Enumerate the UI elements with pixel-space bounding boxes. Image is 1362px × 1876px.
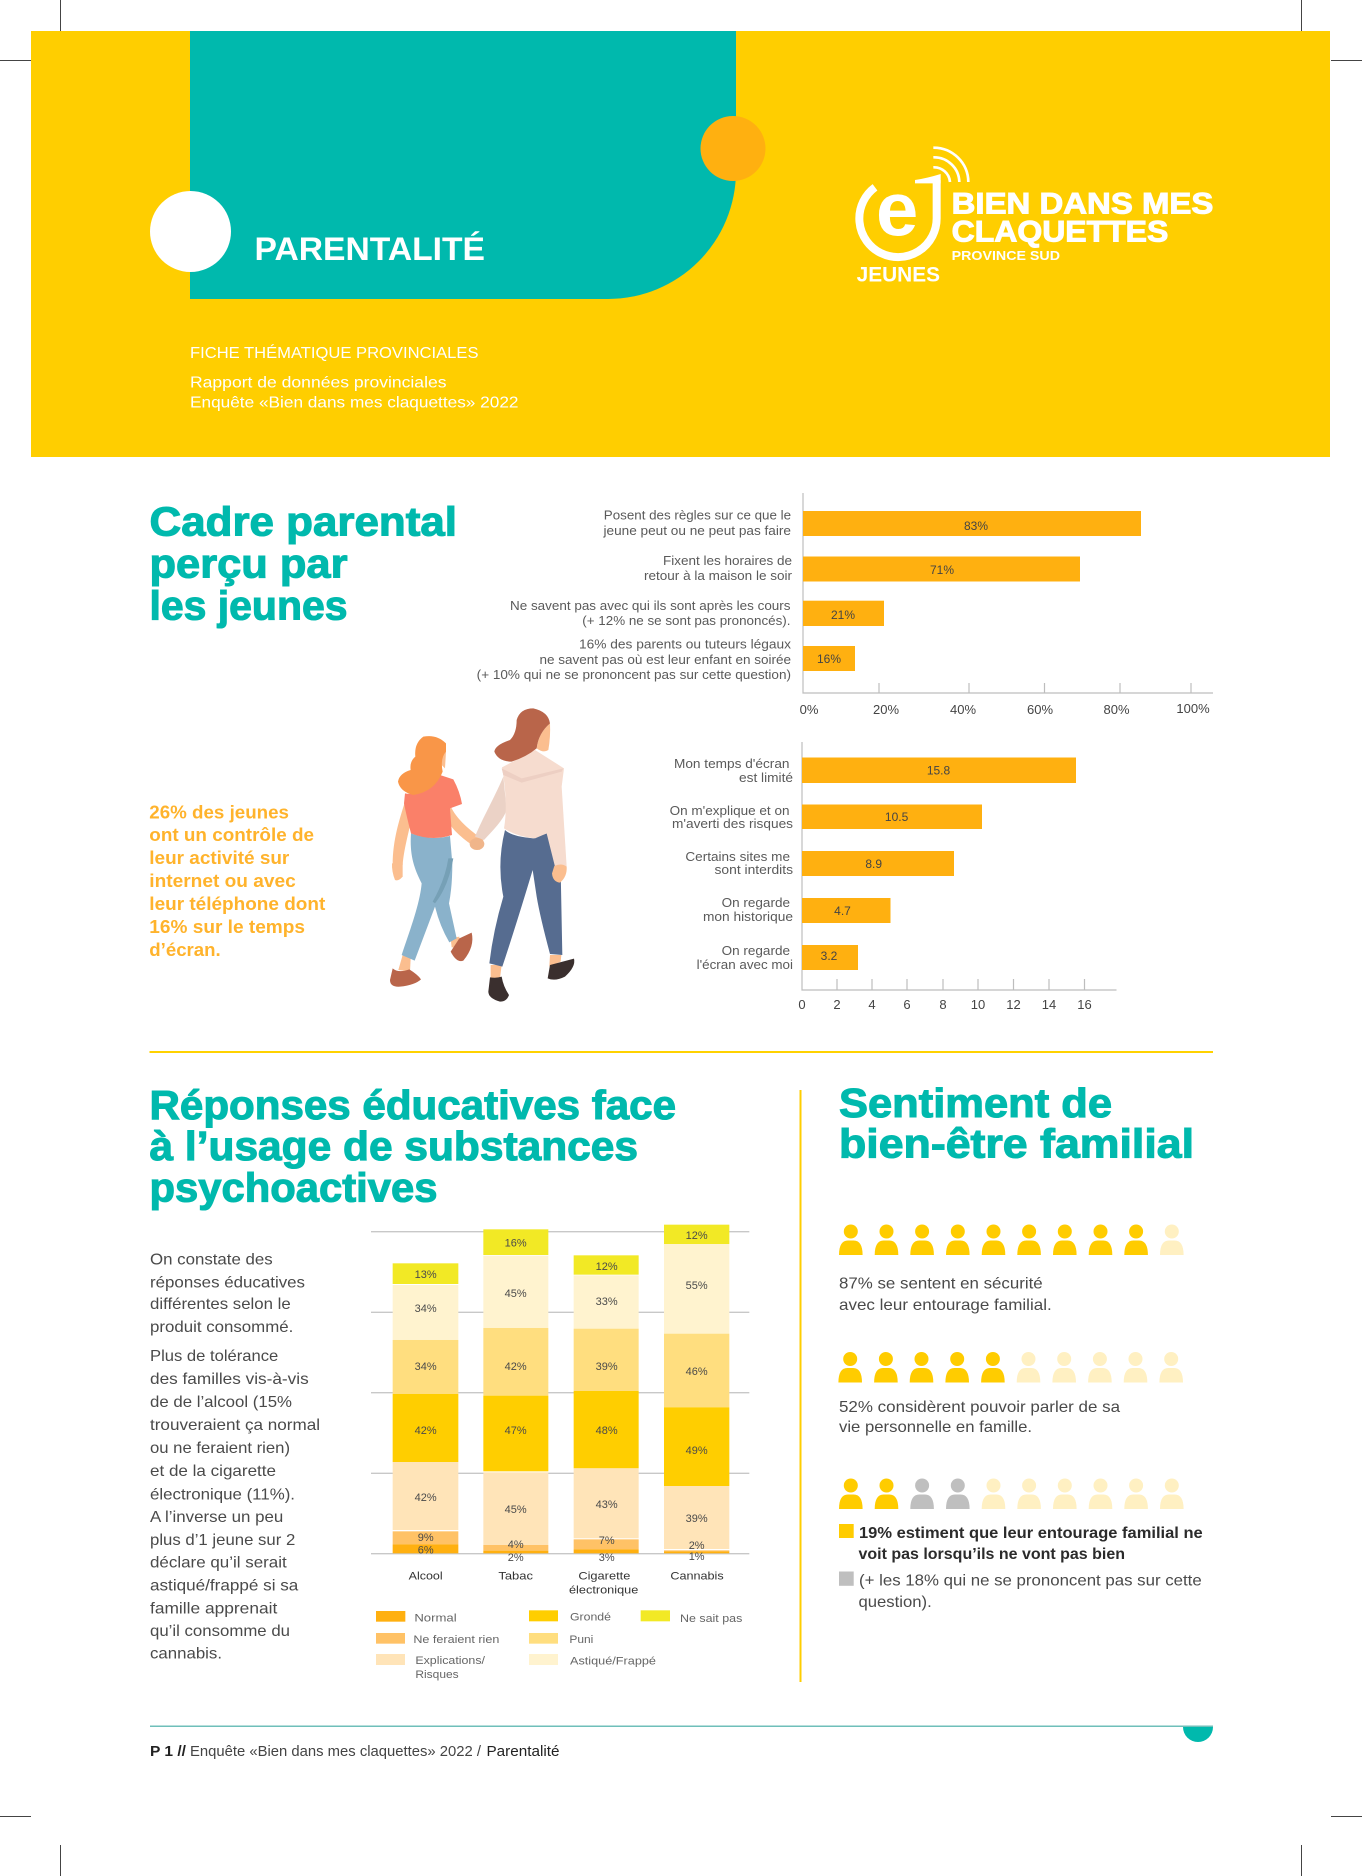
callout: 26% des jeunes: 16% sur le temps	[149, 917, 305, 937]
bar chart: contrôle du temps d'écran: 16	[1077, 997, 1092, 1012]
text: 87%	[839, 1276, 1052, 1314]
category labels: Cannabis	[670, 1571, 724, 1583]
bar: Alcool: 34%	[415, 1303, 437, 1315]
callout: 26% des jeunes: internet ou avec	[149, 871, 296, 891]
callout: 26% des jeunes: 26% des jeunes	[149, 802, 289, 822]
legend: Grondé	[570, 1612, 611, 1624]
bar chart: contrôle du temps d'écran: 10	[971, 997, 985, 1012]
text: 19% with yellow key	[839, 1524, 1203, 1563]
logo: Bien dans mes claquettes	[857, 148, 1213, 287]
bar: Cannabis: 39%	[686, 1513, 708, 1525]
text block: réponses éducatives: déclare qu’il serait	[150, 1554, 287, 1571]
bar: Cannabis	[664, 1225, 729, 1563]
category labels: électronique	[569, 1585, 638, 1597]
bar chart: contrôle du temps d'écran: 4.7	[834, 904, 851, 918]
bar: Alcool: 9%	[418, 1532, 434, 1544]
bar chart: contrôle du temps d'écran: 3.2	[821, 949, 838, 963]
heading: Cadre parental perçu par les jeunes: les jeunes	[150, 582, 348, 628]
bar chart: cadre parental	[477, 493, 1213, 717]
footer	[150, 1726, 1213, 1760]
logo: Bien dans mes claquettes: PROVINCE SUD	[952, 248, 1060, 263]
text: 87%: 87% se sentent en sécurité	[839, 1276, 1043, 1293]
logo: Bien dans mes claquettes: BIEN DANS MES	[952, 187, 1213, 220]
bar chart: cadre parental: 83%	[964, 519, 988, 533]
text: 18% with grey key	[839, 1572, 1202, 1611]
callout: 26% des jeunes: leur téléphone dont	[149, 894, 325, 914]
text block: réponses éducatives: qu’il consomme du	[150, 1623, 290, 1640]
footer: Enquête «Bien dans mes claquettes» 2022 /	[190, 1744, 482, 1760]
text: 52%	[839, 1399, 1120, 1436]
bar chart: contrôle du temps d'écran: 8.9	[865, 857, 882, 871]
bar chart: cadre parental: ne savent pas où est leur enfant en soirée	[540, 652, 791, 667]
text block: réponses éducatives: famille apprenait	[150, 1600, 278, 1617]
text block: réponses éducatives	[150, 1251, 320, 1663]
footer: P 1 //	[150, 1744, 186, 1760]
text block: réponses éducatives: et de la cigarette	[150, 1463, 276, 1480]
footer: Parentalité	[486, 1744, 560, 1760]
bar: Cannabis: 55%	[686, 1280, 708, 1292]
legend	[376, 1610, 743, 1681]
heading: Réponses éducatives	[150, 1082, 676, 1210]
bar chart: contrôle du temps d'écran: 6	[903, 997, 911, 1012]
text block: réponses éducatives: cannabis.	[150, 1646, 222, 1663]
bar: Tabac: 2%	[508, 1552, 524, 1564]
pictogram row: 19% and 18%	[839, 1478, 1184, 1509]
category labels: Cigarette	[578, 1571, 630, 1583]
bar: Alcool: 13%	[415, 1269, 437, 1281]
bar chart: cadre parental: Posent des règles sur ce que le	[604, 508, 791, 523]
bar chart: contrôle du temps d'écran: 2	[833, 997, 841, 1012]
text block: réponses éducatives: ou ne feraient rien)	[150, 1440, 290, 1457]
bar chart: contrôle du temps d'écran: 12	[1006, 997, 1021, 1012]
heading: Sentiment de bien-être familial: bien-être familial	[839, 1120, 1194, 1166]
bar chart: cadre parental: 16%	[817, 652, 841, 666]
bar: Tabac: 45%	[505, 1288, 527, 1300]
bar chart: cadre parental: Fixent les horaires de	[663, 553, 792, 568]
bar chart: contrôle du temps d'écran: On m'explique et on	[670, 803, 790, 818]
text: 52%: vie personnelle en famille.	[839, 1419, 1032, 1436]
callout: 26% des jeunes: leur activité sur	[149, 848, 289, 868]
logo: Bien dans mes claquettes: e	[876, 167, 918, 252]
bar: Alcool: 34%	[415, 1361, 437, 1373]
bar chart: cadre parental: 80%	[1103, 702, 1130, 717]
category labels	[409, 1571, 724, 1597]
bar: Cannabis: 2%	[689, 1540, 705, 1552]
header subtitle text	[190, 343, 519, 411]
bar: Cannabis: 49%	[686, 1445, 708, 1457]
bar: Tabac: 45%	[505, 1504, 527, 1516]
text: 18% with grey key: question).	[858, 1594, 932, 1611]
bar chart: cadre parental: 16% des parents ou tuteurs légaux	[579, 637, 792, 652]
legend: Ne sait pas	[680, 1613, 743, 1625]
bar: Alcool	[393, 1263, 458, 1557]
bar chart: contrôle du temps d'écran: 4	[868, 997, 876, 1012]
text block: réponses éducatives: plus d’1 jeune sur 2	[150, 1532, 295, 1549]
bar chart: cadre parental: (+ 10% qui ne se prononcent pas sur cette question)	[477, 667, 791, 682]
white circle	[150, 191, 231, 272]
bar chart: contrôle du temps d'écran: est limité	[739, 770, 793, 785]
heading: Cadre parental perçu par les jeunes: Cadre parental	[150, 499, 457, 545]
bar chart: contrôle du temps d'écran: On regarde	[722, 895, 790, 910]
bar chart: contrôle du temps d'écran: 8	[939, 997, 947, 1012]
legend: Ne feraient rien	[413, 1634, 499, 1646]
heading: Réponses éducatives: Réponses éducatives face	[150, 1082, 676, 1128]
header subtitle text: FICHE THÉMATIQUE PROVINCIALES	[190, 343, 478, 362]
callout: 26% des jeunes: d’écran.	[149, 940, 221, 960]
bar chart: contrôle du temps d'écran: sont interdits	[714, 862, 794, 877]
text block: réponses éducatives: différentes selon le	[150, 1296, 291, 1313]
logo: Bien dans mes claquettes: CLAQUETTES	[952, 216, 1168, 249]
heading: Cadre parental perçu par les jeunes	[150, 499, 457, 628]
bar: Cannabis: 12%	[686, 1230, 708, 1242]
bar chart: cadre parental: 20%	[873, 702, 899, 717]
stacked bar chart: réponses éducatives par substance	[371, 1225, 749, 1681]
bar chart: cadre parental: 60%	[1027, 702, 1053, 717]
bar chart: contrôle du temps d'écran: 15.8	[927, 763, 951, 777]
text: 87%: avec leur entourage familial.	[839, 1297, 1052, 1314]
text block: réponses éducatives: trouveraient ça normal	[150, 1417, 320, 1434]
bar chart: cadre parental: Ne savent pas avec qui ils sont après les cours	[510, 598, 791, 613]
bar: Alcool: 42%	[415, 1492, 437, 1504]
text block: réponses éducatives: de de l’alcool (15%	[150, 1394, 292, 1411]
bar: Cigarette électronique: 39%	[596, 1361, 618, 1373]
text block: réponses éducatives: électronique (11%).	[150, 1486, 295, 1503]
panel: header banner	[31, 31, 1330, 457]
bar chart: cadre parental: 21%	[831, 608, 855, 622]
legend: Astiqué/Frappé	[570, 1656, 656, 1668]
bar: Tabac: 47%	[505, 1425, 527, 1437]
bar: Cigarette électronique: 12%	[596, 1261, 618, 1273]
legend: Explications/	[415, 1655, 486, 1667]
heading: Sentiment de bien-être familial	[839, 1080, 1194, 1166]
text: 19% with yellow key: 19% estiment que leur entourage familial ne	[859, 1525, 1203, 1542]
bar: Cigarette électronique	[574, 1255, 639, 1564]
text block: réponses éducatives: On constate des	[150, 1251, 273, 1268]
illustration: two people walking hand in hand	[390, 708, 574, 1002]
bar chart: contrôle du temps d'écran: Certains sites me	[685, 849, 790, 864]
bar chart: cadre parental: (+ 12% ne se sont pas prononcés).	[582, 613, 790, 628]
orange circle	[700, 116, 766, 181]
legend: Puni	[569, 1634, 593, 1646]
heading: Cadre parental perçu par les jeunes: perçu par	[150, 541, 348, 587]
bar chart: contrôle du temps d'écran: On regarde	[722, 943, 790, 958]
bar chart: contrôle du temps d'écran: l'écran avec moi	[697, 957, 793, 972]
bar: Cigarette électronique: 7%	[599, 1535, 615, 1547]
bar chart: contrôle du temps d'écran: m'averti des risques	[672, 816, 794, 831]
bar chart: cadre parental: jeune peut ou ne peut pas faire	[602, 523, 791, 538]
bar: Alcool: 42%	[415, 1425, 437, 1437]
category labels: Tabac	[498, 1571, 534, 1583]
legend: Normal	[414, 1613, 457, 1625]
text block: réponses éducatives: Plus de tolérance	[150, 1348, 278, 1365]
logo: Bien dans mes claquettes: JEUNES	[857, 263, 940, 287]
bar chart: cadre parental: 71%	[930, 563, 954, 577]
heading: Sentiment de bien-être familial: Sentiment de	[839, 1080, 1112, 1126]
text block: réponses éducatives: produit consommé.	[150, 1319, 293, 1336]
bar chart: contrôle du temps d'écran: 0	[798, 997, 806, 1012]
bar: Cannabis: 1%	[689, 1551, 705, 1563]
pictogram row: 87%	[839, 1224, 1184, 1255]
text: 52%: 52% considèrent pouvoir parler de sa	[839, 1399, 1120, 1416]
header subtitle text: Enquête «Bien dans mes claquettes» 2022	[190, 394, 519, 411]
bar: Tabac: 16%	[505, 1238, 527, 1250]
bar: Cigarette électronique: 43%	[596, 1499, 618, 1511]
bar: Tabac: 4%	[508, 1539, 524, 1551]
bar: Cannabis: 46%	[686, 1366, 708, 1378]
bar chart: contrôle du temps d'écran: 14	[1042, 997, 1056, 1012]
bar chart: cadre parental: 0%	[800, 702, 819, 717]
text block: réponses éducatives: astiqué/frappé si sa	[150, 1578, 298, 1595]
bar chart: contrôle du temps d'écran: Mon temps d'écran	[674, 756, 790, 771]
bar: Alcool: 6%	[418, 1545, 434, 1557]
bar: Cigarette électronique: 33%	[596, 1296, 618, 1308]
bar: Tabac: 42%	[505, 1361, 527, 1373]
pictogram row: 52%	[838, 1352, 1183, 1382]
text block: réponses éducatives: A l’inverse un peu	[150, 1509, 283, 1526]
callout: 26% des jeunes: ont un contrôle de	[149, 825, 314, 845]
bar chart: cadre parental: retour à la maison le soir	[644, 568, 793, 583]
callout: 26% des jeunes	[149, 802, 325, 960]
bar chart: contrôle du temps d'écran: mon historique	[703, 909, 793, 924]
heading: Réponses éducatives: psychoactives	[150, 1164, 438, 1210]
title: Parentalité: PARENTALITÉ	[254, 231, 485, 267]
bar: Cigarette électronique: 48%	[596, 1425, 618, 1437]
bar: Tabac	[483, 1229, 548, 1564]
bar chart: contrôle du temps d'écran	[670, 742, 1116, 1012]
bar chart: contrôle du temps d'écran: 10.5	[885, 810, 909, 824]
text block: réponses éducatives: réponses éducatives	[150, 1274, 305, 1291]
legend: Risques	[415, 1669, 459, 1681]
text block: réponses éducatives: des familles vis-à-vis	[150, 1371, 309, 1388]
header subtitle text: Rapport de données provinciales	[190, 374, 446, 391]
bar: Cigarette électronique: 3%	[599, 1552, 615, 1564]
heading: Réponses éducatives: à l’usage de substances	[150, 1123, 638, 1169]
teal title shape	[190, 31, 736, 299]
bar chart: cadre parental: 100%	[1176, 701, 1210, 716]
text: 19% with yellow key: voit pas lorsqu’ils ne vont pas bien	[858, 1546, 1125, 1563]
text: 18% with grey key: (+ les 18% qui ne se prononcent pas sur cette	[859, 1573, 1202, 1590]
bar chart: cadre parental: 40%	[950, 702, 976, 717]
category labels: Alcool	[409, 1571, 443, 1583]
